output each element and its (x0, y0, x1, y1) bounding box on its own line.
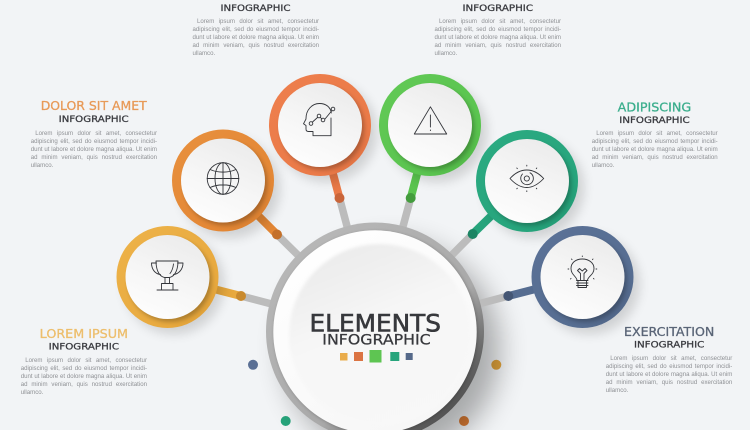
text block: dolor sit amet: adipiscing elit, sed do eiusmod tempor incidi- (31, 138, 157, 144)
heading: exercitation: EXERCITATION (624, 324, 714, 339)
node: globe (172, 130, 282, 240)
node: light bulb (503, 226, 640, 334)
text block: dolor sit amet (31, 130, 157, 168)
node: eye (468, 130, 584, 239)
text block: top right: Lorem ipsum dolor sit amet, consectetur (439, 18, 561, 25)
text block: lorem ipsum: dunt ut labore et dolore magna aliqua. Ut enim (21, 373, 147, 380)
grey connectors (241, 198, 508, 308)
text block: lorem ipsum: ullamco. (21, 389, 43, 396)
text block: exercitation: adipiscing elit, sed do eiusmod tempor incidi- (606, 363, 732, 370)
text block: top right: adipiscing elit, sed do eiusmod tempor incidi- (434, 26, 561, 33)
heading: dolor sit amet: DOLOR SIT AMET (41, 98, 147, 113)
text block: top left: Lorem ipsum dolor sit amet, consectetur (197, 18, 319, 25)
heading: adipiscing (618, 100, 691, 126)
text block: adipiscing: ad minim veniam, quis nostrud exercitation (592, 154, 718, 161)
text block: top right (434, 18, 561, 57)
text block: adipiscing: ullamco. (592, 162, 614, 169)
text block: exercitation: ullamco. (606, 387, 628, 394)
text block: dolor sit amet: dunt ut labore et dolore magna aliqua. Ut enim (31, 146, 157, 152)
text block: lorem ipsum: Lorem ipsum dolor sit amet, consectetur (25, 357, 147, 364)
heading: dolor sit amet: INFOGRAPHIC (59, 115, 129, 125)
text block: lorem ipsum: adipiscing elit, sed do eiusmod tempor incidi- (21, 365, 147, 372)
heading: lorem ipsum (40, 326, 128, 353)
text block: top left: adipiscing elit, sed do eiusmod tempor incidi- (192, 26, 319, 33)
icon: warning triangle (414, 107, 447, 134)
icon: globe (207, 163, 239, 194)
icon: light bulb (568, 256, 597, 288)
text block: exercitation: Lorem ipsum dolor sit amet, consectetur (610, 355, 732, 362)
node: trophy (116, 226, 246, 334)
main circle (266, 222, 484, 430)
colour squares (340, 350, 413, 362)
decorative dots (248, 360, 501, 426)
heading: top right: INFOGRAPHIC (462, 4, 533, 14)
text block: adipiscing: Lorem ipsum dolor sit amet, consectetur (596, 130, 718, 137)
node: warning triangle (379, 74, 487, 203)
icon: trophy (152, 261, 183, 290)
node: head (269, 74, 377, 203)
text block: exercitation (606, 355, 732, 394)
heading: exercitation: INFOGRAPHIC (634, 340, 704, 350)
text block: adipiscing: dunt ut labore et dolore magna aliqua. Ut enim (592, 146, 718, 153)
text block: dolor sit amet: Lorem ipsum dolor sit amet, consectetur (35, 130, 157, 136)
text block: exercitation: ad minim veniam, quis nostrud exercitation (606, 379, 732, 386)
text block: lorem ipsum (21, 357, 147, 396)
icon: eye (510, 165, 544, 192)
text block: top left: dunt ut labore et dolore magna aliqua. Ut enim (192, 34, 319, 41)
text block: dolor sit amet: ullamco. (31, 162, 53, 168)
heading: exercitation (624, 324, 714, 350)
text block: top left (192, 18, 319, 57)
heading: dolor sit amet (41, 98, 147, 125)
heading: adipiscing: INFOGRAPHIC (619, 116, 690, 126)
text block: top right: ullamco. (434, 50, 457, 57)
text block: adipiscing: adipiscing elit, sed do eiusmod tempor incidi- (592, 138, 718, 145)
text block: lorem ipsum: ad minim veniam, quis nostrud exercitation (21, 381, 147, 388)
text block: adipiscing (592, 130, 718, 169)
text block: exercitation: dunt ut labore et dolore magna aliqua. Ut enim (606, 371, 732, 378)
main subtitle: INFOGRAPHIC (322, 333, 431, 349)
heading: lorem ipsum: INFOGRAPHIC (49, 343, 119, 353)
main circle shadow (284, 242, 500, 430)
text block: dolor sit amet: ad minim veniam, quis nostrud exercitation (31, 154, 157, 160)
main title: ELEMENTS (310, 310, 441, 338)
heading: top left: INFOGRAPHIC (220, 4, 290, 14)
heading: adipiscing: ADIPISCING (618, 100, 691, 114)
text block: top left: ullamco. (192, 50, 215, 57)
text block: top left: ad minim veniam, quis nostrud exercitation (192, 42, 319, 49)
heading: lorem ipsum: LOREM IPSUM (40, 326, 128, 341)
text block: top right: dunt ut labore et dolore magna aliqua. Ut enim (434, 34, 561, 41)
text block: top right: ad minim veniam, quis nostrud exercitation (434, 42, 561, 49)
icon: head with chart (304, 104, 335, 136)
